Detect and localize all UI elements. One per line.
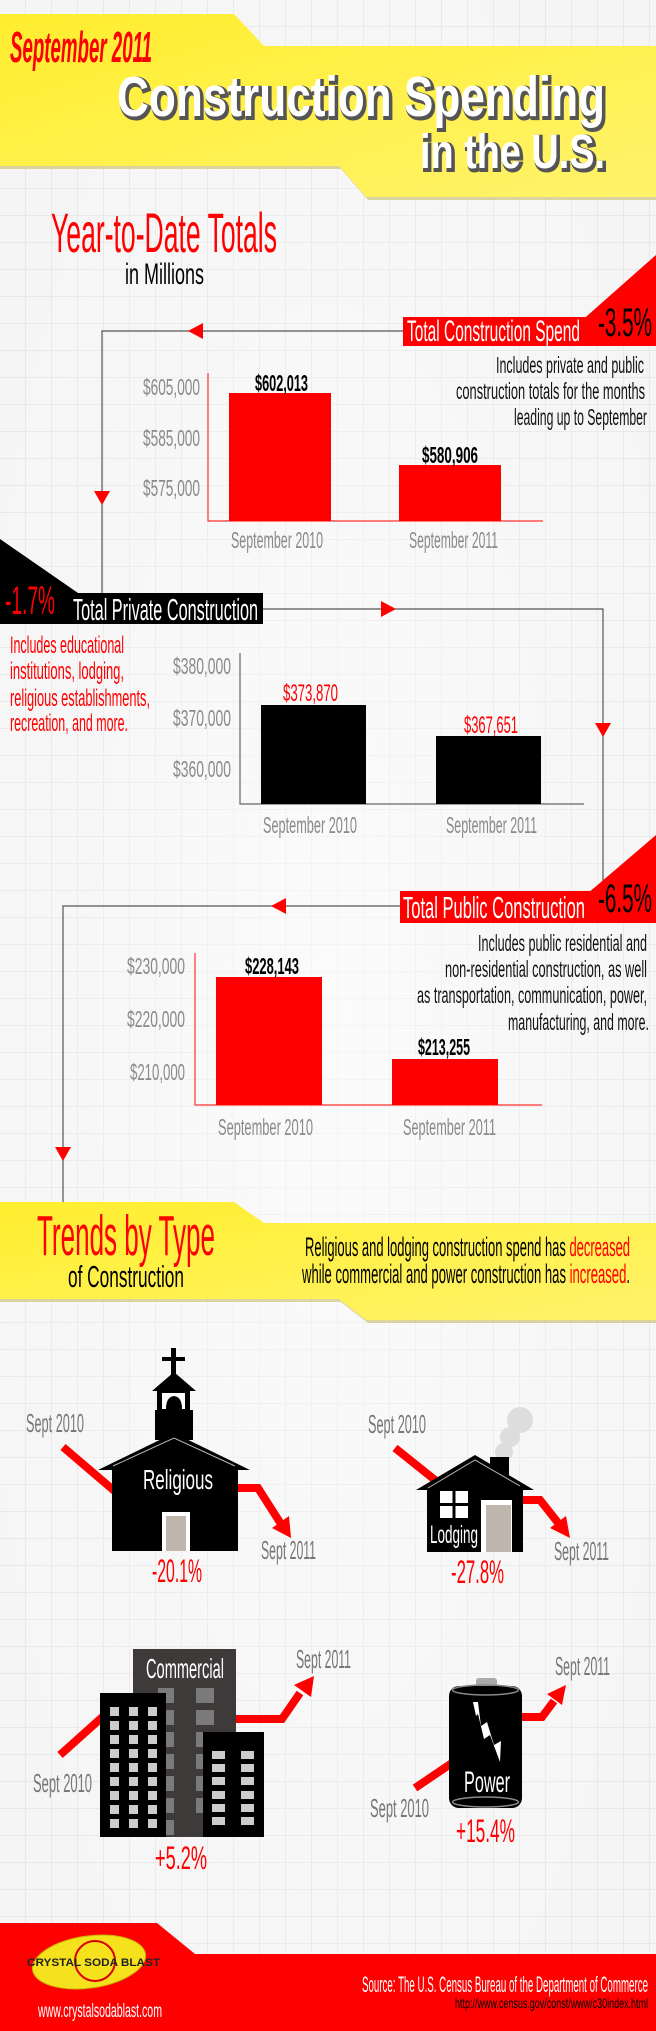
bar chart: private construction: September 2011: [446, 812, 537, 838]
bar chart: total construction: $602,013: [255, 370, 308, 396]
bar chart: private construction: $360,000: [173, 756, 231, 782]
bar chart: public construction: $220,000: [127, 1006, 185, 1032]
bar chart: private construction: September 2010: [263, 812, 357, 838]
flow connector: private to public: [263, 601, 611, 891]
icon: battery: Power: [464, 1766, 510, 1799]
trend: religious: Sept 2010: [26, 1408, 84, 1438]
bar chart: public construction: $228,143: [245, 953, 299, 979]
bar chart: public construction: [127, 953, 542, 1140]
bar chart: total construction: $585,000: [143, 425, 200, 451]
bar chart: private construction: $373,870: [283, 680, 338, 707]
bar chart: public construction: $213,255: [418, 1034, 470, 1060]
bar chart: total construction: $580,906: [422, 442, 478, 468]
title banner: September 2011: [10, 23, 152, 72]
trend: lodging: -27.8%: [451, 1554, 504, 1590]
title banner: [0, 14, 656, 200]
title text: in the U.S.: [422, 128, 607, 181]
icon: house: Lodging: [430, 1521, 478, 1549]
trend: commercial: [33, 1644, 351, 1876]
trend: lodging: [368, 1407, 609, 1590]
icon: house: [416, 1407, 534, 1552]
panel: total private construction: [0, 539, 263, 737]
trends banner: Trends by Type: [37, 1204, 215, 1268]
panel: total construction spend: [403, 255, 656, 430]
trends banner: [0, 1202, 656, 1323]
text: Year-to-Date Totals: [51, 201, 277, 264]
icon: church: [98, 1348, 250, 1551]
logo: CRYSTAL SODA BLAST: [27, 1957, 160, 1969]
heading: trends by type: of Construction: [68, 1259, 184, 1294]
description: recreation, and more.: [10, 710, 128, 737]
trend: lodging: Sept 2010: [368, 1409, 426, 1439]
icon: office buildings: [100, 1649, 264, 1837]
description: institutions, lodging,: [10, 658, 124, 685]
bar chart: private construction: [173, 653, 584, 838]
trend: religious: [26, 1348, 316, 1589]
heading: year-to-date totals: in Millions: [125, 258, 204, 291]
flow connector: construction to private: [94, 323, 403, 593]
description: Includes educational: [10, 632, 124, 659]
trend: power: [370, 1651, 610, 1849]
bar chart: public construction: September 2011: [403, 1114, 496, 1140]
trend: commercial: +5.2%: [155, 1840, 207, 1876]
icon: battery: [449, 1678, 522, 1808]
panel: total public construction: [400, 835, 656, 1035]
heading: year-to-date totals: [51, 201, 277, 291]
trend: power: Sept 2010: [370, 1793, 429, 1823]
summary text: [302, 1232, 630, 1289]
bar chart: total construction: September 2011: [409, 527, 498, 553]
website: www.crystalsodablast.com: [37, 2001, 162, 2022]
bar chart: public construction: $210,000: [130, 1059, 185, 1085]
title text: [117, 65, 607, 181]
bar chart: public construction: September 2010: [218, 1114, 313, 1140]
text: Sept 2011: [296, 1644, 351, 1674]
panel: total private construction: -1.7%: [5, 579, 55, 623]
trend: commercial: Sept 2010: [33, 1768, 92, 1798]
heading: trends by type: [37, 1204, 215, 1294]
title text: in the U.S.: [420, 126, 605, 179]
text: Sept 2011: [261, 1535, 316, 1565]
icon: church: Religious: [143, 1464, 213, 1495]
description: [417, 930, 649, 1035]
bar chart: private construction: $367,651: [464, 712, 518, 739]
description: [456, 352, 647, 430]
logo: [27, 1928, 160, 1996]
icon: office buildings: Commercial: [146, 1653, 224, 1684]
source: [362, 1972, 648, 2011]
footer: [0, 1923, 656, 2031]
description: [10, 632, 150, 737]
flow connector: public to trends: [55, 898, 400, 1202]
bar chart: total construction: $575,000: [143, 475, 200, 501]
bar chart: private construction: $380,000: [173, 653, 231, 679]
description: religious establishments,: [10, 685, 150, 712]
bar chart: total construction: $605,000: [143, 374, 200, 400]
bar chart: private construction: $370,000: [173, 705, 231, 731]
bar chart: total construction: September 2010: [231, 527, 323, 553]
bar chart: total construction: [143, 370, 543, 553]
panel: total private construction: Total Private Construction: [73, 592, 258, 627]
trend: religious: -20.1%: [152, 1553, 202, 1589]
trend: power: +15.4%: [456, 1813, 515, 1849]
bar chart: public construction: $230,000: [127, 953, 185, 979]
